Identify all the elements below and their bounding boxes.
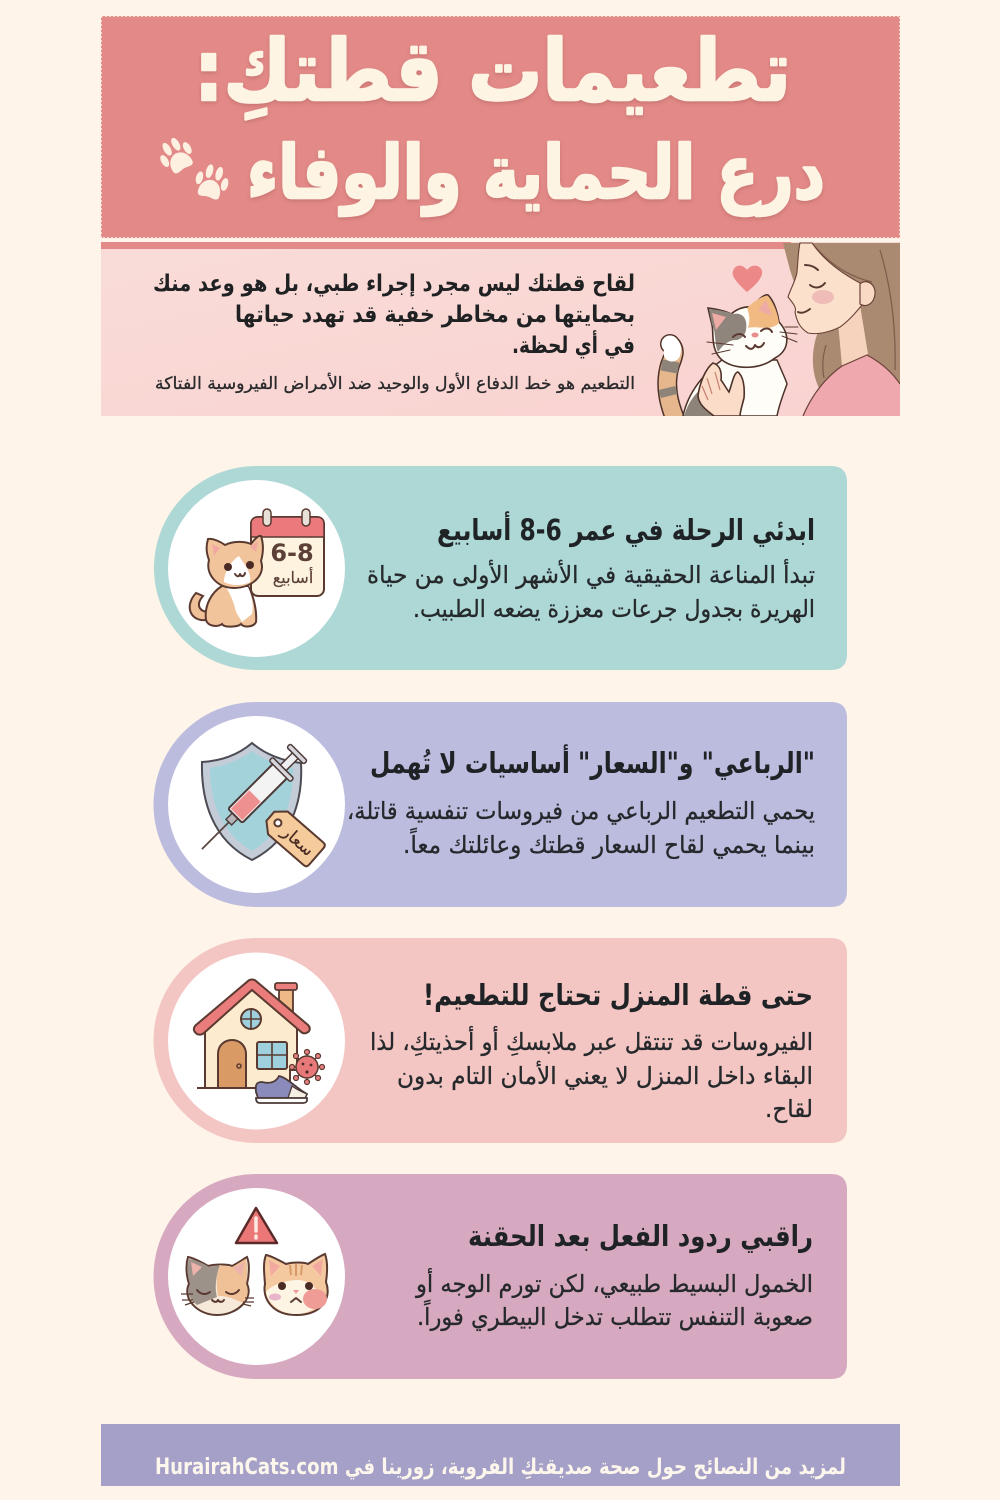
card 1 body line 1: تبدأ المناعة الحقيقية في الأشهر الأولى من حياة (367, 559, 815, 589)
card 3 body line 1: الفيروسات قد تنتقل عبر ملابسكِ أو أحذيتكِ، لذا (370, 1026, 813, 1056)
kitten muzzle (224, 556, 250, 585)
footer (101, 1424, 900, 1486)
cat body patch (684, 392, 712, 416)
calendar label: أسابيع (273, 567, 313, 588)
tag hole (273, 818, 283, 828)
card background (154, 1174, 847, 1379)
cat tail (667, 344, 680, 430)
right eye (761, 328, 772, 332)
calendar (251, 517, 324, 596)
calendar number: 6-8 (270, 539, 314, 567)
left eye (733, 334, 745, 337)
hand fingers (702, 372, 720, 400)
mouth (212, 1300, 224, 1302)
window bars (257, 1042, 287, 1069)
woman eyebrow (805, 265, 818, 270)
needle hub (226, 813, 238, 825)
card 4 body line 1: الخمول البسيط طبيعي، لكن تورم الوجه أو (415, 1268, 813, 1298)
card 3 body line 3: لقاح. (765, 1095, 813, 1123)
card 1 heading: ابدئي الرحلة في عمر 6-8 أسابيع (437, 511, 815, 547)
title line 2: درع الحماية والوفاء (247, 130, 825, 217)
cat inner ears (712, 300, 772, 330)
round window (241, 1009, 261, 1029)
orange patch (217, 1259, 248, 1303)
tail grey band (669, 361, 671, 372)
cat body (683, 360, 787, 416)
tail outline (667, 344, 680, 430)
roof (194, 980, 310, 1035)
card 4: reactions (154, 1174, 847, 1379)
woman shirt neckline (803, 355, 900, 416)
kitten eyes (224, 561, 254, 571)
eyes (197, 1290, 239, 1294)
kitten body (206, 586, 256, 627)
kitten mouth (235, 573, 245, 576)
card background (154, 702, 847, 907)
icon: paw prints (154, 132, 232, 202)
woman face (788, 243, 866, 334)
muzzle (266, 1280, 322, 1314)
shield inner (210, 751, 293, 851)
warning mark (254, 1218, 258, 1238)
card 2 heading: "الرباعي" و"السعار" أساسيات لا تُهمل (370, 744, 815, 780)
shoe toe (288, 1086, 307, 1098)
icon circle (168, 1188, 345, 1365)
hand (698, 363, 744, 416)
icon: kitten and calendar (190, 509, 324, 627)
chimney cap (275, 983, 297, 990)
tag shape (261, 805, 326, 868)
shoe sole (256, 1098, 307, 1103)
banner background (101, 16, 900, 238)
kitten head (207, 536, 263, 588)
cat head grey patch (709, 309, 746, 352)
swollen cat (264, 1254, 328, 1315)
panel: intro (101, 242, 900, 430)
nose (293, 1290, 299, 1294)
syringe flange (269, 757, 294, 782)
house wall (205, 990, 297, 1088)
card background (154, 938, 847, 1143)
icon circle (168, 716, 345, 893)
door (218, 1040, 246, 1088)
icon circle (168, 480, 345, 657)
tail grey band 2 (667, 388, 669, 396)
whiskers (181, 1294, 254, 1306)
syringe (191, 742, 309, 860)
virus (290, 1050, 324, 1084)
icon: warning and two cats (181, 1208, 328, 1315)
title line 1: تطعيمات قطتكِ: (194, 22, 791, 120)
intro background (101, 242, 900, 416)
window glass (257, 1042, 287, 1069)
syringe barrel (228, 763, 288, 823)
footer text: لمزيد من النصائح حول صحة صديقتكِ الفروية، زورينا في HurairahCats.com (155, 1455, 846, 1480)
tail fill (667, 344, 680, 430)
virus tips (290, 1050, 324, 1084)
swollen cheek (303, 1289, 327, 1309)
virus body (296, 1056, 318, 1078)
heart (733, 266, 762, 292)
cat face (707, 327, 798, 354)
woman smile (798, 309, 810, 313)
intro note: التطعيم هو خط الدفاع الأول والوحيد ضد الأمراض الفيروسية الفتاكة (155, 373, 635, 394)
card 1: start early (154, 466, 847, 670)
cat head (708, 295, 787, 367)
card 3 heading: حتى قطة المنزل تحتاج للتطعيم! (423, 978, 813, 1012)
sleepy cat (181, 1257, 254, 1315)
grey patch (188, 1259, 220, 1305)
hair strands (812, 243, 895, 378)
mouth (746, 343, 764, 349)
shoe (256, 1076, 307, 1103)
head (264, 1254, 328, 1315)
intro line 3: في أي لحظة. (512, 329, 635, 359)
card 4 body line 2: صعوبة التنفس تتطلب تدخل البيطري فوراً. (417, 1300, 813, 1331)
illustration: woman hugging cat (667, 243, 900, 430)
card 3: indoor cats (154, 938, 847, 1143)
card 1 body line 2: الهريرة بجدول جرعات معززة يضعه الطبيب. (413, 595, 815, 623)
card 4 heading: راقبي ردود الفعل بعد الحقنة (468, 1219, 813, 1253)
calendar rings (263, 509, 310, 526)
kitten inner ears (212, 541, 258, 556)
warning triangle (236, 1208, 277, 1243)
cat nose (752, 332, 758, 338)
head (187, 1257, 249, 1315)
forehead stripes (290, 1264, 302, 1276)
card 2: core vaccines (154, 702, 847, 907)
virus spikes (292, 1052, 322, 1082)
kitten chest (226, 587, 253, 622)
intro text (153, 271, 635, 394)
syringe plunger (280, 752, 299, 771)
card 2 body line 2: بينما يحمي لقاح السعار قطتك وعائلتك معاً. (403, 828, 815, 859)
window bars (241, 1009, 261, 1029)
inner ears (269, 1259, 323, 1276)
intro line 2: بحمايتها من مخاطر خفية قد تهدد حياتها (235, 302, 635, 328)
woman hair (783, 243, 900, 392)
woman cheek (812, 290, 834, 304)
virus face (302, 1063, 312, 1074)
icon: house with virus and shoe (194, 980, 324, 1103)
inner ears (191, 1262, 244, 1276)
needle (202, 822, 229, 849)
kitten tail (190, 593, 210, 620)
syringe cap (287, 744, 307, 764)
icon: shield syringe and tag (191, 742, 326, 868)
tail tip (670, 344, 673, 353)
icon circle (168, 952, 345, 1130)
panel: title banner (101, 16, 900, 238)
whiskers (707, 327, 798, 354)
shoe upper (256, 1076, 307, 1098)
left cheek (269, 1294, 281, 1300)
card background (154, 466, 847, 670)
card 3 body line 2: البقاء داخل المنزل لا يعني الأمان التام بدون (397, 1061, 813, 1090)
window glass (241, 1009, 261, 1029)
shield (202, 743, 301, 860)
intro line 1: لقاح قطتك ليس مجرد إجراء طبي، بل هو وعد منك (153, 271, 635, 297)
woman shirt (803, 355, 900, 416)
woman closed eye (810, 283, 825, 287)
calendar header (251, 517, 324, 537)
tag label: سعار (277, 821, 318, 861)
eyes (278, 1282, 313, 1290)
intro top stripe (101, 242, 791, 249)
syringe fluid (231, 790, 261, 820)
ground line (197, 1087, 252, 1089)
chimney (279, 988, 293, 1012)
door knob (237, 1064, 241, 1068)
square window (257, 1042, 287, 1069)
woman ear (860, 282, 875, 306)
mouth (291, 1298, 301, 1302)
woman neck (838, 305, 868, 366)
cat head orange patch (747, 296, 779, 328)
card 2 body line 1: يحمي التطعيم الرباعي من فيروسات تنفسية قاتلة، (347, 797, 815, 825)
footer bar (101, 1424, 900, 1486)
